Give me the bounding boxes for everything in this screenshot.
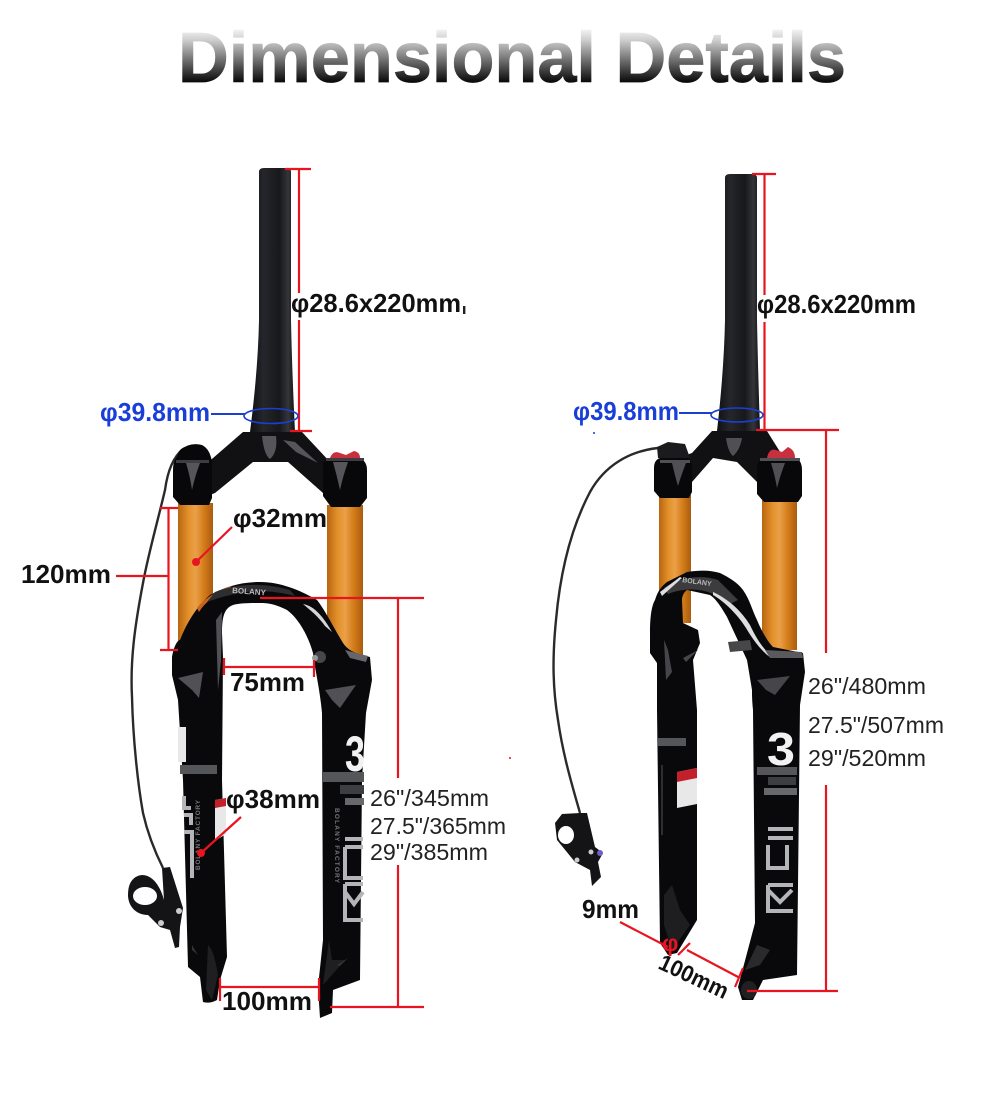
arch width dimension (224, 658, 314, 697)
right axle-to-crown dimension: 29"/520mm (808, 745, 926, 771)
lower leg diameter callout: φ38mm (226, 784, 320, 814)
travel dimension (21, 508, 178, 650)
left axle-to-arch dimension: 27.5"/365mm (370, 813, 506, 839)
right crown-race diameter: φ39.8mm (573, 396, 679, 426)
axle diameter callout: φ (662, 930, 678, 956)
right fork: crown (654, 431, 802, 502)
left fork (128, 168, 372, 1018)
right crown-race diameter (573, 396, 763, 434)
right axle-to-crown dimension (747, 430, 944, 991)
right fork: stanchions (659, 495, 797, 650)
right fork: steerer tube (717, 174, 760, 431)
left steerer dimension: φ28.6x220mm (291, 288, 461, 318)
left steerer dimension (285, 169, 465, 431)
right steerer dimension: φ28.6x220mm (757, 289, 916, 319)
left crown-race diameter: φ39.8mm (100, 397, 210, 427)
left axle-to-arch dimension: 26"/345mm (370, 785, 489, 811)
title: Dimensional Details (178, 19, 846, 98)
left axle-to-arch dimension: 29"/385mm (370, 839, 488, 865)
right fork: remote lever (555, 813, 603, 886)
right fork: remote cable (554, 448, 658, 813)
right steerer dimension (752, 174, 916, 430)
stanchion diameter callout (192, 503, 327, 566)
left fork: right leg decals: BOLANY FACTORY (333, 808, 340, 884)
stanchion diameter callout: φ32mm (233, 503, 327, 533)
left fork: left leg decals (178, 727, 226, 878)
left fork: crown (173, 432, 367, 507)
left fork: left leg decals: BOLANY FACTORY (195, 799, 202, 870)
axle diameter callout (582, 894, 678, 956)
left fork: steerer tube (250, 168, 295, 432)
left fork: remote lever (128, 867, 183, 948)
left fork: arch brand: BOLANY (232, 586, 267, 597)
left fork: lower legs and arch (172, 582, 372, 1018)
lower leg diameter callout (197, 784, 320, 857)
arch width dimension: 75mm (230, 667, 305, 697)
axle spacing dimension left: 100mm (222, 986, 312, 1016)
right fork: right leg decals (757, 723, 797, 911)
left fork: right leg decals: 3 (345, 726, 365, 782)
axle diameter callout: 9mm (582, 894, 639, 924)
right fork: left leg decals (658, 738, 697, 950)
travel dimension: 120mm (21, 559, 111, 589)
left crown-race diameter (100, 397, 298, 427)
right fork (554, 174, 805, 1000)
axle spacing dimension right: 100mm (655, 949, 733, 1004)
right fork: lower legs and arch (650, 571, 805, 1000)
left axle-to-arch dimension (260, 598, 506, 1007)
right fork: arch brand: BOLANY (682, 577, 712, 588)
left fork: remote cable (132, 449, 183, 868)
left fork: right leg decals (323, 726, 365, 920)
right axle-to-crown dimension: 26"/480mm (808, 673, 926, 699)
right axle-to-crown dimension: 27.5"/507mm (808, 712, 944, 738)
left fork: stanchions (178, 503, 363, 657)
right fork: right leg decals: 3 (767, 723, 795, 775)
